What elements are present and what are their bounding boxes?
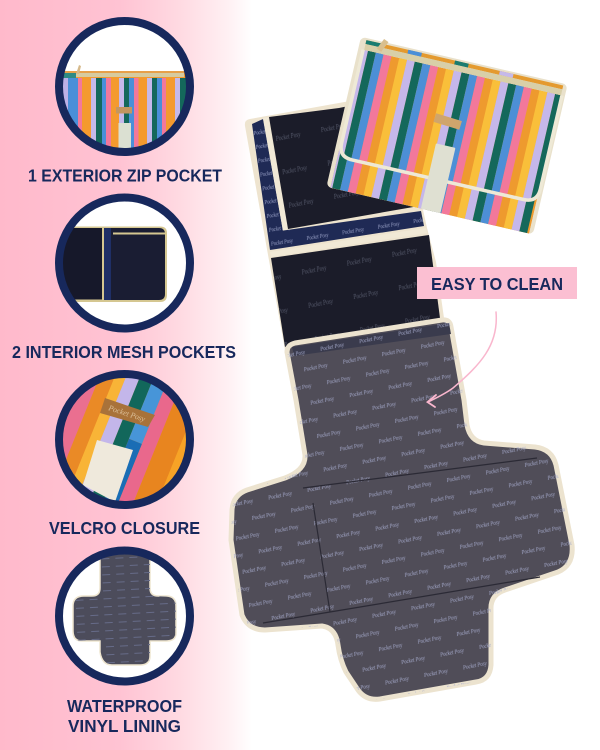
- top zip edge stripes: [366, 40, 563, 89]
- panel: open changing mat, waterproof lining: [231, 320, 572, 699]
- icon: brand badge: [100, 398, 155, 427]
- panel: feature 3 circle, velcro closure: [55, 370, 194, 509]
- heading: waterproof vinyl lining: VINYL LINING: [68, 716, 181, 736]
- velcro tab: [421, 143, 455, 213]
- panel: feature 1 circle, exterior zip pocket: [59, 21, 196, 152]
- flap stripes: [336, 49, 563, 205]
- heading: 1 exterior zip pocket: 1 EXTERIOR ZIP POCKET: [28, 166, 222, 186]
- brand badge: [433, 113, 462, 130]
- lower stripes: [330, 148, 537, 234]
- heading: velcro closure: VELCRO CLOSURE: [49, 518, 200, 538]
- arrow: callout to lining: [428, 312, 496, 407]
- heading: waterproof vinyl lining: WATERPROOF: [67, 696, 182, 716]
- flap border: [338, 50, 562, 203]
- panel: feature 2 circle, interior mesh pockets: [59, 198, 190, 328]
- panel: feature 4 circle, waterproof vinyl lining: [59, 545, 190, 682]
- zipper: [364, 44, 562, 95]
- panel: open changing mat, pockets section: [245, 92, 444, 350]
- zip pull: [376, 38, 389, 53]
- callout: easy to clean: [417, 267, 577, 299]
- heading: waterproof vinyl lining: [67, 696, 182, 736]
- heading: 2 interior mesh pockets: 2 INTERIOR MESH POCKETS: [12, 342, 236, 362]
- callout: easy to clean: EASY TO CLEAN: [431, 274, 563, 294]
- panel: closed striped pouch: [326, 34, 568, 235]
- icon: brand badge: Pocket Posy: [106, 403, 147, 424]
